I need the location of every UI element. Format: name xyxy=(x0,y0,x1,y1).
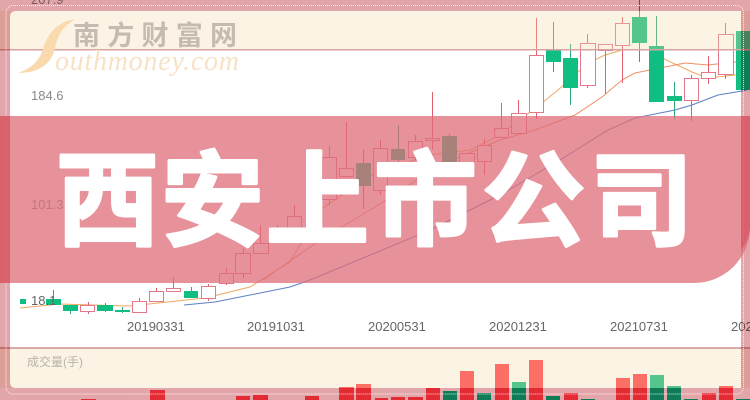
date axis labels: 20191031 xyxy=(247,319,305,334)
volume chart bars xyxy=(81,360,750,400)
header cream tint band xyxy=(0,11,750,49)
watermark Chinese name: 南方财富网 xyxy=(73,20,237,51)
date axis labels: 20201231 xyxy=(489,319,547,334)
short moving average xyxy=(20,50,750,308)
falling candle bodies xyxy=(20,17,750,312)
moving average lines xyxy=(20,50,750,308)
candle wicks: rising xyxy=(88,17,726,314)
rising candle bodies xyxy=(80,24,734,312)
icon: orange S swoosh xyxy=(18,19,76,73)
title band xyxy=(0,116,750,283)
price axis labels: 18.1 xyxy=(31,293,56,308)
volume label: 成交量(手) xyxy=(27,354,83,369)
candlestick chart xyxy=(20,0,750,314)
watermark logo xyxy=(18,19,239,77)
price axis labels: 184.6 xyxy=(31,88,64,103)
price axis labels: 101.3 xyxy=(31,197,64,212)
price axis labels xyxy=(31,0,64,308)
date axis labels xyxy=(127,319,750,334)
volume panel cream tint band xyxy=(0,349,750,388)
watermark domain: outhmoney.com xyxy=(55,46,239,77)
title band darker left edge xyxy=(0,116,10,283)
long moving average xyxy=(184,89,750,305)
candle wicks: falling xyxy=(54,0,674,314)
date axis labels: 20200531 xyxy=(368,319,426,334)
title: 西安上市公司 xyxy=(56,144,693,259)
medium moving average xyxy=(263,61,750,280)
date axis labels: 20210731 xyxy=(610,319,668,334)
date axis labels: 20190331 xyxy=(127,319,185,334)
title band darker right edge xyxy=(741,116,750,250)
